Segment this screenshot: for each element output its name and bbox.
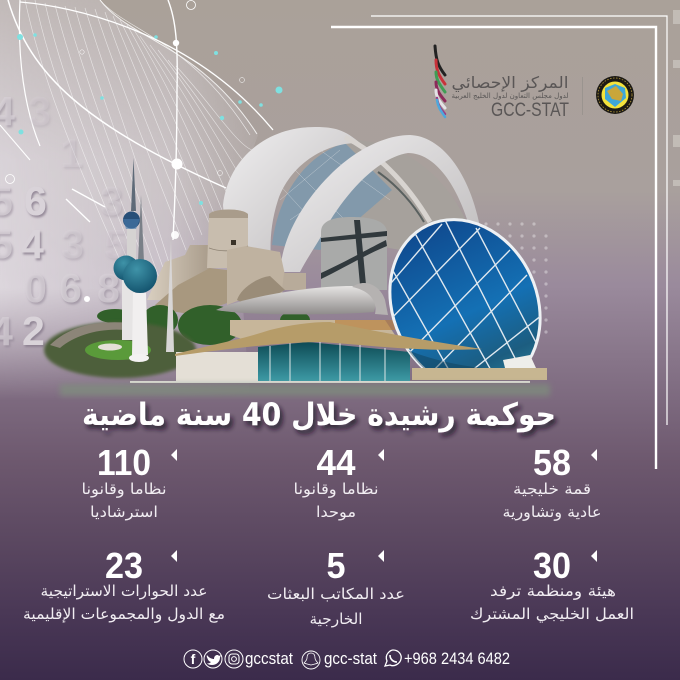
label line 2: الخارجية — [310, 610, 362, 628]
label: نظاما وقانونا — [82, 480, 166, 498]
tower: main sphere — [123, 195, 157, 362]
marker — [171, 449, 177, 461]
tower: small sphere — [114, 158, 140, 340]
icon: instagram — [225, 650, 243, 668]
marker — [171, 550, 177, 562]
rocks — [155, 268, 285, 315]
dome lattice — [272, 140, 472, 250]
label line 2: عادية وتشاورية — [502, 503, 602, 521]
cylinder building — [321, 217, 387, 290]
label line 2: العمل الخليجي المشترك — [470, 605, 634, 624]
decorative dots beside tower — [472, 222, 548, 334]
stat: 5 — [267, 545, 405, 628]
handle: gcc-stat: gcc-stat — [324, 649, 377, 668]
architecture collage — [44, 127, 567, 415]
label line 2: استرشاديا — [90, 503, 158, 521]
label: عدد المكاتب البعثات — [267, 585, 405, 603]
logo arabic name: المركز الإحصائي — [452, 73, 568, 93]
Aldar building — [388, 218, 542, 368]
faded background numerals — [0, 88, 127, 354]
value: 44 — [316, 442, 356, 483]
station roof — [175, 322, 482, 356]
network nodes — [17, 33, 282, 302]
fort — [147, 210, 306, 305]
marker — [591, 550, 597, 562]
phone number: +968 2434 6482 — [404, 649, 510, 668]
faded background numerals: 6 — [24, 178, 47, 224]
title: حوكمة رشيدة خلال 40 سنة ماضية — [82, 397, 556, 433]
Kuwait towers — [114, 158, 174, 362]
logo subtitle: لدول مجلس التعاون لدول الخليج العربية — [452, 92, 568, 100]
stat: 110 — [82, 442, 177, 521]
icon: facebook: f — [191, 651, 196, 667]
faded background numerals: 6 — [59, 265, 82, 311]
white arch left — [223, 127, 360, 262]
marker — [591, 449, 597, 461]
right edge building sliver — [673, 10, 680, 186]
icon: twitter — [204, 650, 222, 668]
icon: snapchat — [302, 651, 320, 669]
faded background numerals: 3 — [100, 178, 123, 224]
value: 30 — [533, 545, 571, 586]
stat: 44 — [294, 442, 384, 521]
label: هيئة ومنظمة ترفد — [490, 582, 616, 600]
label: عدد الحوارات الاستراتيجية — [40, 582, 208, 600]
station walls and glass — [130, 342, 530, 383]
faded background numerals: 0 — [24, 265, 47, 311]
GCC emblem — [596, 76, 634, 114]
value: 58 — [533, 442, 571, 483]
value: 23 — [105, 545, 143, 586]
faded background numerals: 1 — [60, 130, 83, 176]
faded background numerals: 3 — [28, 88, 51, 134]
outer frame lines — [331, 16, 667, 469]
logo divider — [582, 77, 583, 115]
marker — [378, 550, 384, 562]
icon: whatsapp — [385, 650, 401, 666]
thin arch strut — [345, 137, 430, 222]
white arch right — [280, 135, 481, 272]
water reflection — [60, 384, 550, 396]
stat: 58 — [502, 442, 602, 521]
faded background numerals: 2 — [22, 308, 45, 354]
trees — [97, 305, 310, 345]
label: قمة خليجية — [513, 480, 591, 498]
footer contact bar — [184, 649, 510, 669]
faded background numerals: 4 — [21, 221, 44, 267]
value: 5 — [326, 545, 346, 586]
label line 2: مع الدول والمجموعات الإقليمية — [23, 605, 225, 623]
logo: GCC-STAT — [435, 46, 634, 121]
faded background numerals: 3 — [61, 221, 84, 267]
value: 110 — [97, 442, 151, 483]
tower: needle — [166, 240, 174, 352]
faded background numerals: 5 — [104, 221, 127, 267]
left light panel — [0, 0, 258, 400]
faded background numerals: 8 — [97, 265, 120, 311]
stat: 30 — [470, 545, 634, 624]
handle: gccstat: gccstat — [245, 649, 293, 668]
network line mesh — [0, 0, 273, 285]
stat: 23 — [23, 545, 225, 623]
label line 2: موحدا — [316, 503, 356, 521]
waterfront buildings — [412, 368, 547, 380]
logo latin name: GCC-STAT — [491, 100, 569, 121]
garden island — [44, 322, 196, 378]
icon: facebook — [184, 650, 202, 668]
logo ribbon — [435, 46, 445, 117]
marker — [378, 449, 384, 461]
lens building — [216, 283, 395, 345]
label: نظاما وقانونا — [294, 480, 378, 498]
